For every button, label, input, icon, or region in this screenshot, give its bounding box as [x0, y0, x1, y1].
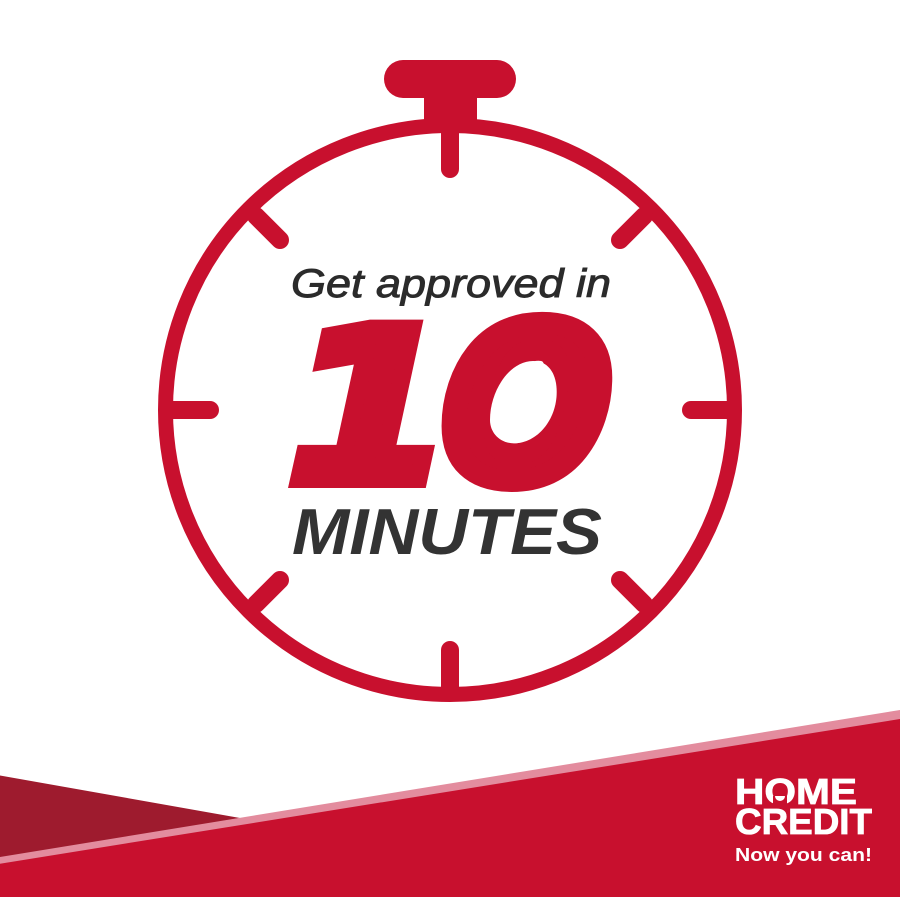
logo word: credit: CREDIT — [735, 801, 872, 842]
big number: 10 — [289, 285, 608, 530]
logo word: home: HOME — [735, 771, 857, 812]
stopwatch button — [384, 60, 516, 98]
logo: home credit — [735, 771, 872, 865]
logo smile notch — [773, 796, 787, 806]
digits: 0 — [445, 285, 608, 528]
dial tick marks — [170, 130, 730, 688]
zero counter — [490, 361, 557, 443]
heading: minutes: MINUTES — [292, 495, 602, 568]
footer: light diagonal band — [0, 710, 900, 866]
icon: stopwatch — [166, 60, 734, 694]
digits: 1 — [289, 287, 452, 530]
footer: dark triangle — [0, 776, 240, 860]
stopwatch dial ring — [166, 126, 734, 694]
logo tagline: Now you can! — [735, 844, 872, 865]
stopwatch stem — [424, 95, 477, 128]
footer: red base — [0, 719, 900, 897]
heading: get approved in: Get approved in — [291, 262, 611, 306]
